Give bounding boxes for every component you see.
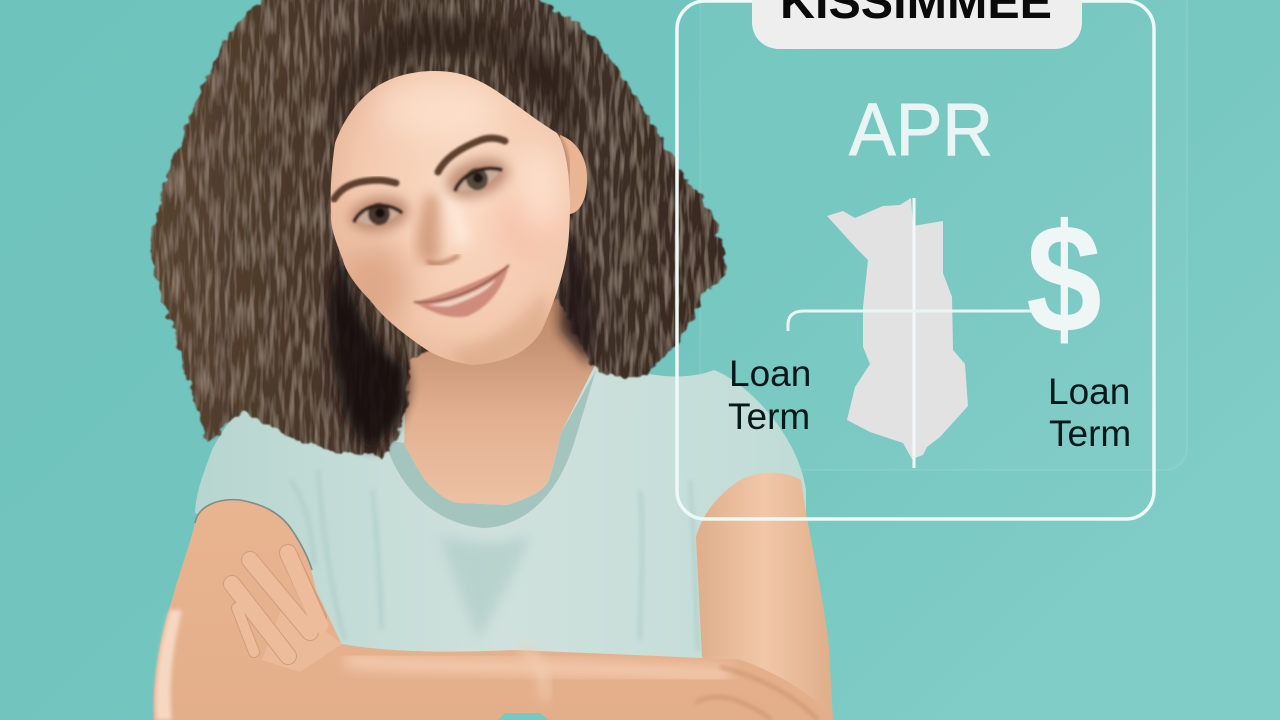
hair shadow near cheek [328, 250, 408, 450]
shirt [195, 360, 806, 662]
eyebrow left [334, 180, 396, 199]
face [331, 71, 587, 380]
map silhouette [827, 198, 968, 459]
neck [404, 280, 594, 505]
hair shadow crown [328, 15, 576, 150]
hair shadow right of neck [560, 230, 594, 365]
icon: dollar sign: $ [1026, 192, 1102, 365]
shirt folds [290, 470, 698, 650]
person: smiling woman with curly hair [151, 0, 833, 720]
label: right loan term: Loan [1048, 371, 1130, 412]
shirt collar [385, 370, 596, 528]
hair [151, 0, 725, 457]
left upper arm [154, 500, 350, 720]
eye left [354, 203, 402, 225]
eye right [455, 168, 502, 191]
right upper arm [696, 473, 833, 720]
hand fingers on arm [232, 553, 342, 672]
panel: faint glass backing [700, 0, 1187, 470]
tab: title label [752, 0, 1082, 49]
eyebrow right [438, 138, 505, 172]
crossed forearm and hand [200, 644, 829, 720]
nose [428, 256, 458, 264]
facial shading [341, 80, 562, 380]
label: right loan term: Term [1049, 413, 1131, 454]
label: left loan term: Loan [729, 353, 811, 394]
face shape [331, 71, 570, 365]
sleeve hem line [195, 500, 312, 570]
map divider vertical line [912, 198, 916, 468]
label: left loan term: Term [728, 396, 810, 437]
panel: rounded outline frame [677, 1, 1154, 519]
heading: APR: APR [849, 88, 993, 171]
connector line to dollar [788, 311, 1032, 331]
arm highlight [156, 610, 182, 720]
mouth [414, 265, 509, 317]
shirt chest shadow [440, 535, 530, 640]
ear [556, 135, 587, 214]
